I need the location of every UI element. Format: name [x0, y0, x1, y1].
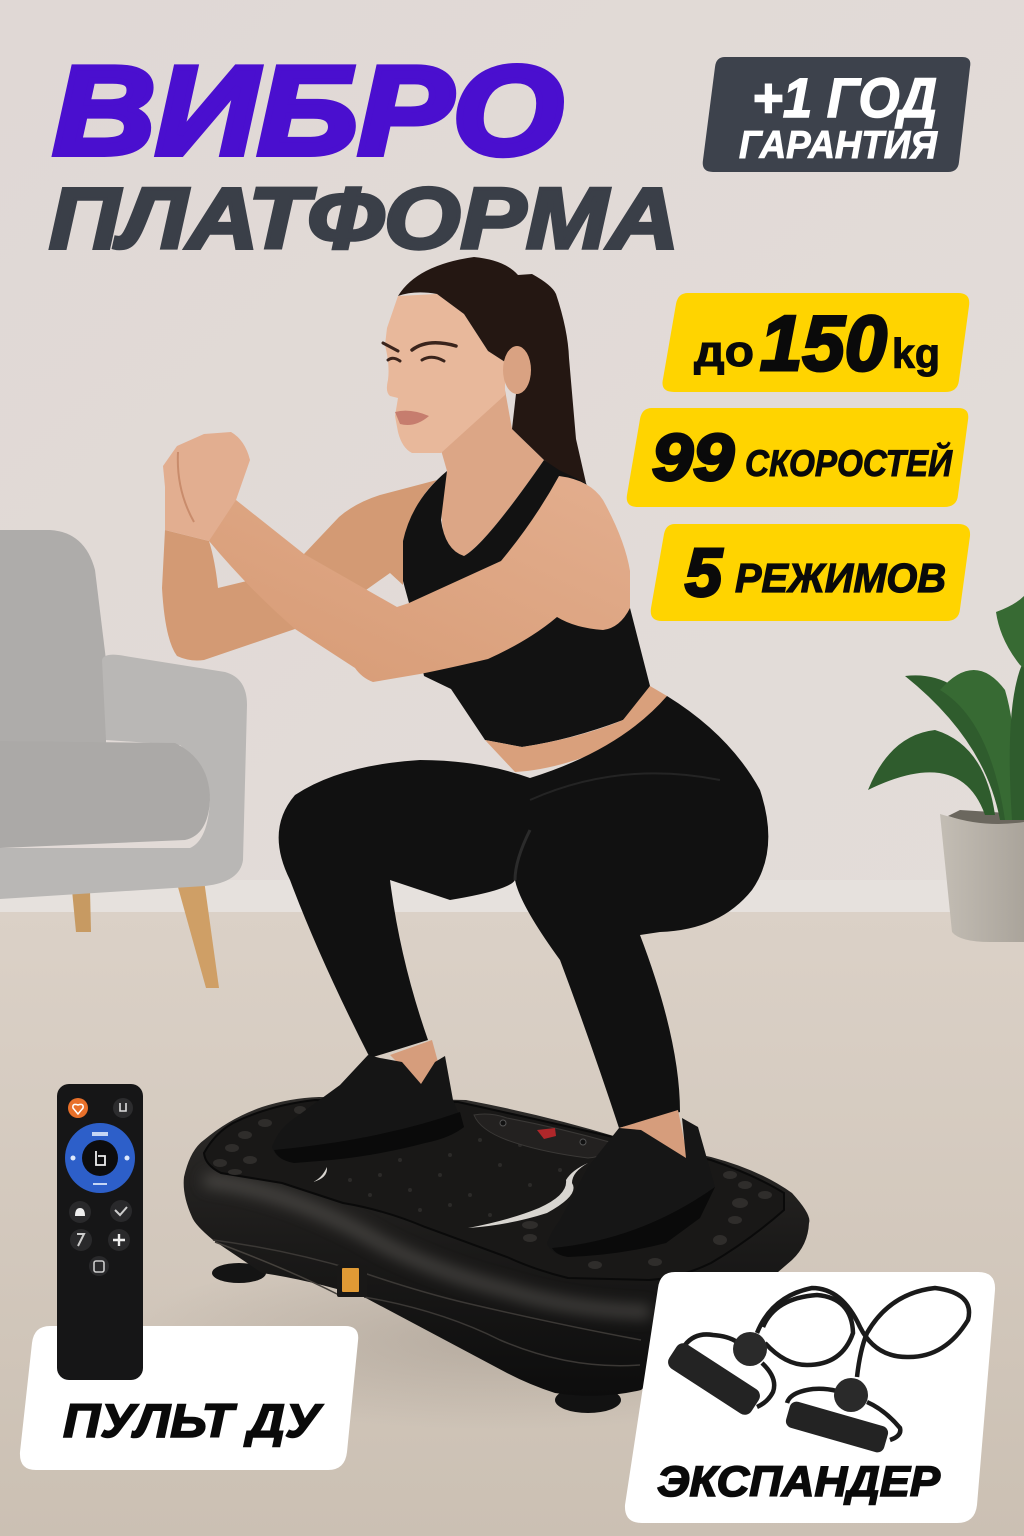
ball stoppers — [733, 1332, 767, 1366]
badge: load capacity — [662, 293, 969, 392]
body — [184, 1097, 809, 1396]
face — [385, 294, 505, 453]
badge: speeds — [627, 408, 968, 507]
card: expander: ЭКСПАНДЕР — [657, 1458, 940, 1506]
foam handles — [665, 1340, 763, 1418]
badge: load capacity: kg — [892, 330, 940, 377]
badge: modes: 5 — [685, 535, 723, 611]
lips — [395, 411, 429, 425]
icon: expander with handles — [665, 1288, 969, 1454]
seams — [213, 1240, 641, 1340]
badge: speeds: 99 — [652, 420, 734, 494]
title: ВИБРО — [53, 40, 563, 181]
badge: modes: РЕЖИМОВ — [735, 555, 946, 601]
control panel — [474, 1114, 613, 1158]
armchair — [0, 530, 247, 988]
midriff — [485, 686, 667, 772]
woman — [162, 257, 768, 1128]
leggings — [279, 696, 768, 1128]
badge: modes — [651, 524, 970, 621]
vibration platform — [184, 1040, 809, 1413]
badge: warranty: ГАРАНТИЯ — [739, 124, 938, 167]
title: ПЛАТФОРМА — [49, 171, 679, 267]
far arm — [162, 480, 437, 660]
top surface — [204, 1100, 784, 1280]
left shoe — [390, 1040, 438, 1086]
ear — [503, 346, 531, 394]
hair and ponytail — [398, 257, 586, 483]
potted plant — [868, 596, 1024, 942]
icon: remote control — [57, 1084, 143, 1380]
swoosh logos — [468, 1163, 588, 1228]
badge: warranty — [703, 57, 970, 172]
neck — [441, 390, 544, 556]
fists — [163, 432, 250, 541]
badge: speeds: СКОРОСТЕЙ — [745, 442, 953, 484]
title — [49, 40, 679, 267]
card: expander — [625, 1272, 995, 1523]
massage dots — [213, 1106, 772, 1269]
badge: load capacity: 150 — [760, 299, 887, 387]
feet — [212, 1263, 266, 1283]
facial features — [383, 343, 456, 361]
card: remote control: ПУЛЬТ ДУ — [63, 1394, 323, 1447]
card: remote control — [20, 1326, 358, 1470]
power button — [337, 1265, 367, 1297]
badge: warranty: +1 ГОД — [752, 66, 937, 129]
highlight — [204, 1180, 650, 1312]
badge: load capacity: до — [694, 327, 754, 376]
right shoe — [619, 1110, 688, 1160]
near arm and shoulder — [180, 476, 630, 682]
sports top — [403, 460, 650, 747]
